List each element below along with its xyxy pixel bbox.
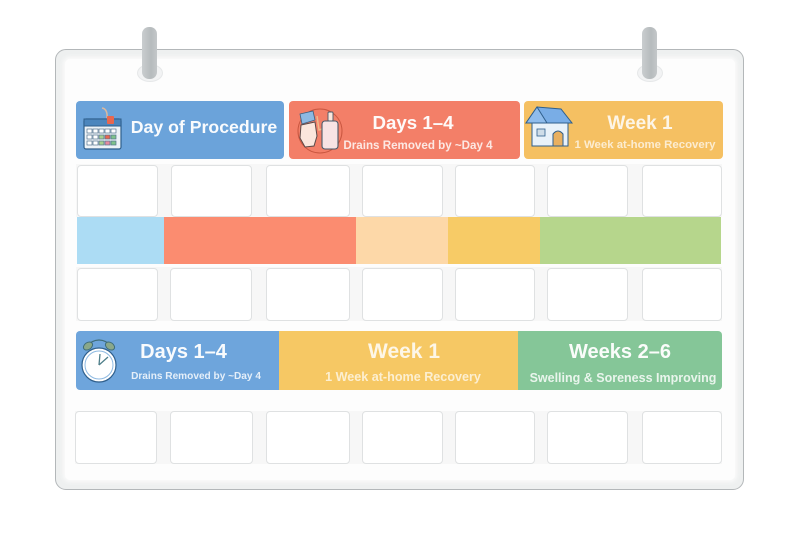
subtitle: Drains Removed by ~Day 4: [131, 371, 261, 382]
segment: week 1: [448, 217, 540, 264]
binding ring: right: [637, 27, 663, 82]
heading: Day of Procedure: [131, 117, 277, 137]
bottom row of day cells: [75, 411, 722, 464]
segment: early recovery: [356, 217, 448, 264]
subtitle: 1 Week at-home Recovery: [574, 139, 715, 151]
icon: calendar: [83, 107, 122, 150]
segment: day of procedure: [77, 217, 164, 264]
subtitle: Drains Removed by ~Day 4: [343, 139, 493, 152]
binding ring: left: [137, 27, 163, 82]
middle row of day cells: [76, 267, 722, 321]
icon: hand and drain bottle: [298, 108, 342, 154]
segment: Days 1-4: [76, 331, 279, 390]
segment: Week 1: [279, 331, 518, 390]
heading: Days 1–4: [140, 341, 227, 363]
heading: Week 1: [368, 340, 440, 363]
heading: Weeks 2–6: [569, 341, 671, 363]
top row of day cells: [76, 164, 722, 217]
icon: house: [525, 106, 573, 146]
subtitle: 1 Week at-home Recovery: [325, 370, 481, 384]
segment: days 1-4: [164, 217, 356, 264]
heading: Week 1: [607, 113, 673, 134]
subtitle: Swelling & Soreness Improving: [530, 371, 716, 385]
icon: alarm clock: [81, 339, 117, 383]
calendar board: [55, 49, 744, 490]
header: Days 1-4: [289, 101, 520, 159]
lower banner: [76, 331, 722, 390]
header: Week 1: [524, 101, 723, 159]
board inner face: [65, 59, 735, 480]
segment: Weeks 2-6: [518, 331, 722, 390]
heading: Days 1–4: [372, 112, 454, 133]
segment: weeks 2-6: [540, 217, 721, 264]
header: Day of Procedure: [76, 101, 284, 159]
colour timeline strip: [77, 217, 721, 264]
